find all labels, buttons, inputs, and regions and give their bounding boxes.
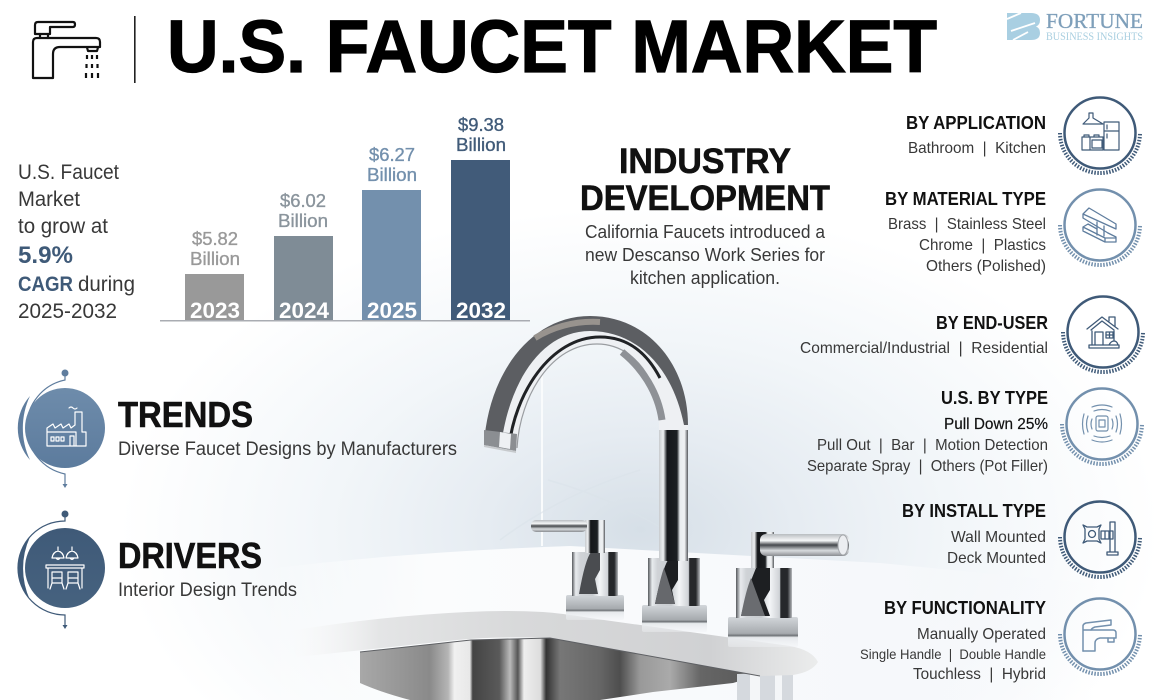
drivers icon circle <box>25 528 105 608</box>
trends heading: TRENDS <box>118 394 253 435</box>
drivers section <box>18 510 297 629</box>
segment: by functionality: Single Handle | Double Handle <box>860 646 1046 662</box>
segment: by install type: Deck Mounted <box>947 550 1046 567</box>
bar 2024: Billion <box>278 211 328 231</box>
header divider <box>134 16 136 83</box>
CAGR text block: CAGR <box>18 273 73 296</box>
bar 2025: $6.27 <box>369 145 415 165</box>
industry development <box>580 142 830 288</box>
CAGR text block: 5.9% <box>18 242 73 269</box>
logo: Fortune Business Insights: FORTUNE <box>1046 9 1143 33</box>
icon: motion sensor <box>1062 388 1142 464</box>
segment: by application: BY APPLICATION <box>906 113 1046 133</box>
bar 2024: $6.02 <box>280 191 326 211</box>
bar 2032: 2032 <box>456 298 506 323</box>
bar 2023: Billion <box>190 249 240 269</box>
CAGR text block: 2025-2032 <box>18 300 117 323</box>
icon: house <box>1063 296 1143 372</box>
CAGR text block <box>18 161 135 323</box>
industry development: INDUSTRY <box>619 142 791 181</box>
segment: u.s. by type: U.S. BY TYPE <box>941 388 1048 408</box>
icon: wall mount <box>1060 502 1140 577</box>
CAGR text block: during <box>78 273 135 296</box>
trends description: Diverse Faucet Designs by Manufacturers <box>118 439 457 460</box>
logo: Fortune Business Insights: BUSINESS INSIGHTS <box>1046 29 1143 43</box>
title: U.S. FAUCET MARKET <box>167 5 937 88</box>
counter rim <box>283 611 818 676</box>
bar 2025: Billion <box>367 165 417 185</box>
industry development: DEVELOPMENT <box>580 179 830 218</box>
segment: by material type: BY MATERIAL TYPE <box>885 189 1046 209</box>
segment: by application: Bathroom | Kitchen <box>908 140 1046 157</box>
bar 2024 <box>274 191 333 323</box>
segment: by application <box>906 98 1140 173</box>
bar 2025: 2025 <box>367 298 417 323</box>
segment: u.s. by type: Pull Down 25% <box>944 416 1048 433</box>
segment: u.s. by type: Pull Out | Bar | Motion Detection <box>817 437 1048 454</box>
bar 2023: $5.82 <box>192 229 238 249</box>
segment: by end-user: BY END-USER <box>936 313 1048 333</box>
icon: steel beam <box>1060 190 1140 265</box>
industry development: kitchen application. <box>630 268 780 288</box>
segment: by functionality: Touchless | Hybrid <box>913 666 1046 683</box>
trends section <box>18 370 457 488</box>
drivers heading: DRIVERS <box>118 535 262 576</box>
segment: by material type: Chrome | Plastics <box>919 237 1046 254</box>
segment: by material type: Others (Polished) <box>926 258 1046 275</box>
industry development: new Descanso Work Series for <box>585 245 825 265</box>
bar chart <box>160 115 530 323</box>
logo: Fortune Business Insights <box>1007 9 1143 43</box>
icon: kitchen <box>1060 98 1140 173</box>
segment: by install type: Wall Mounted <box>951 529 1046 546</box>
trends timeline arc <box>18 370 68 488</box>
icon: faucet <box>1060 598 1140 674</box>
sink basin <box>360 638 760 700</box>
segment: by material type: Brass | Stainless Steel <box>888 216 1046 233</box>
bar 2023 <box>185 229 244 323</box>
segment: by material type <box>885 189 1140 275</box>
segment: by functionality: Manually Operated <box>917 626 1046 643</box>
segment: by install type <box>902 501 1140 577</box>
segment: by install type: BY INSTALL TYPE <box>902 501 1046 521</box>
industry development: California Faucets introduced a <box>585 222 826 242</box>
segment: by end-user <box>800 296 1143 372</box>
segment: by functionality: BY FUNCTIONALITY <box>884 598 1046 618</box>
segment: by functionality <box>860 598 1140 683</box>
bar 2024: 2024 <box>279 298 330 323</box>
CAGR text block: Market <box>18 188 80 211</box>
icon: faucet logo <box>33 22 100 78</box>
CAGR text block: U.S. Faucet <box>18 161 119 184</box>
bar 2032: $9.38 <box>458 115 504 135</box>
trends icon circle <box>25 388 105 468</box>
bar 2032 <box>451 115 510 323</box>
CAGR text block: to grow at <box>18 215 108 238</box>
segment: u.s. by type: Separate Spray | Others (Pot Filler) <box>807 458 1048 475</box>
left handle <box>531 520 624 620</box>
drivers timeline arc <box>18 510 68 629</box>
drivers description: Interior Design Trends <box>118 580 297 601</box>
bar 2023: 2023 <box>190 298 240 323</box>
spout <box>484 316 707 632</box>
right handle <box>728 532 849 647</box>
bar 2025 <box>362 145 421 323</box>
segment: u.s. by type <box>807 388 1142 475</box>
bar 2032: Billion <box>456 135 506 155</box>
segment: by end-user: Commercial/Industrial | Residential <box>800 340 1048 357</box>
